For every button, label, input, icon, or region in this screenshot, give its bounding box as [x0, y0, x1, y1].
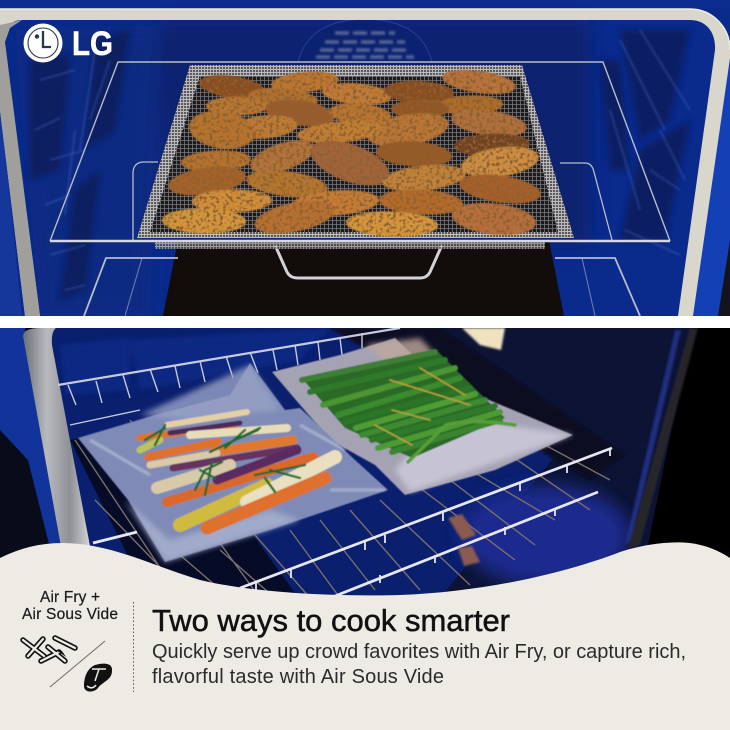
reflection on oven floor: [448, 514, 480, 566]
feature label: Air Fry +: [40, 589, 100, 606]
icon: french fries: [23, 638, 75, 661]
wire oven rack: [50, 62, 670, 316]
logo wordmark: LG: [72, 25, 113, 63]
air fry basket handle: [275, 245, 442, 278]
herb sprigs: [145, 425, 305, 495]
divider slash: [50, 641, 105, 687]
asparagus spears: [302, 352, 515, 462]
LG logo: [24, 24, 113, 63]
rear fan vent: [298, 19, 432, 62]
oven floor dark panel: [163, 240, 564, 316]
vacuum bag: asparagus: [272, 338, 573, 495]
logo mark: [24, 24, 62, 62]
dotted divider: [132, 602, 134, 692]
body copy: flavorful taste with Air Sous Vide: [152, 666, 444, 688]
oven interior: [0, 328, 730, 600]
vacuum bag: rainbow carrots: [78, 363, 388, 562]
icon: steak: [84, 664, 112, 692]
door gasket: [0, 9, 730, 316]
lower rack diagonal bars: [75, 420, 610, 598]
back oven rack: [58, 328, 400, 425]
panel: air sous vide oven photo: [0, 328, 730, 600]
bottom cream wave panel: [0, 542, 730, 730]
carrots: [140, 412, 335, 528]
body copy: Quickly serve up crowd favorites with Air Fry, or capture rich,: [152, 641, 686, 663]
feature label: Air Sous Vide: [22, 606, 118, 623]
heading: Two ways to cook smarter: [152, 604, 510, 638]
air fry mesh basket: [50, 65, 670, 249]
front oven rack rods: [93, 448, 612, 598]
door gasket: [23, 328, 90, 552]
oven cavity interior: [0, 0, 730, 316]
panel: air fry oven photo: [0, 0, 730, 316]
chicken wings: [162, 66, 542, 240]
